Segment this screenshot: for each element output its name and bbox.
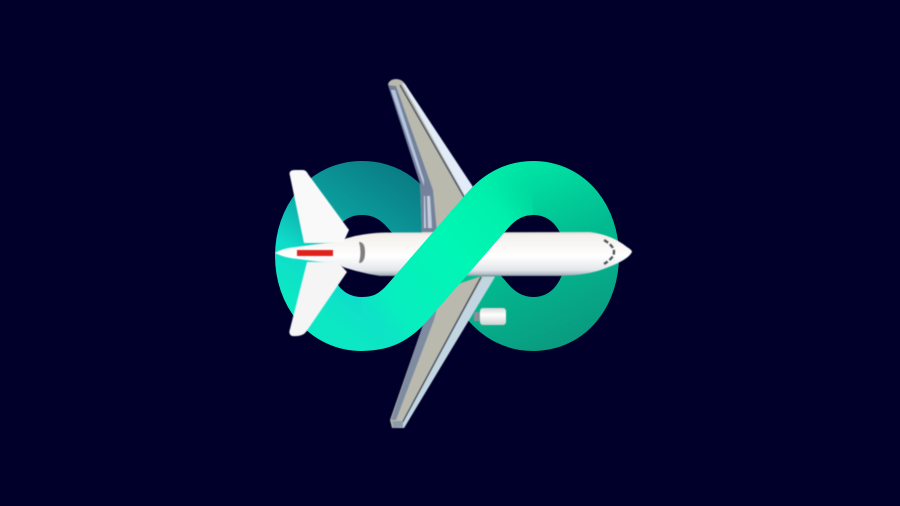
upper wing	[388, 79, 473, 235]
tail stabilizers	[289, 170, 349, 336]
infinity: bright crossing band	[362, 188, 533, 324]
infinity: left ring	[302, 188, 448, 324]
fuselage with tail cone	[275, 232, 632, 276]
lower wing	[390, 276, 495, 428]
infinity: right ring	[448, 188, 592, 324]
engine	[474, 308, 506, 325]
cockpit windows	[604, 240, 614, 264]
tail stripe and engine ring	[297, 242, 365, 263]
